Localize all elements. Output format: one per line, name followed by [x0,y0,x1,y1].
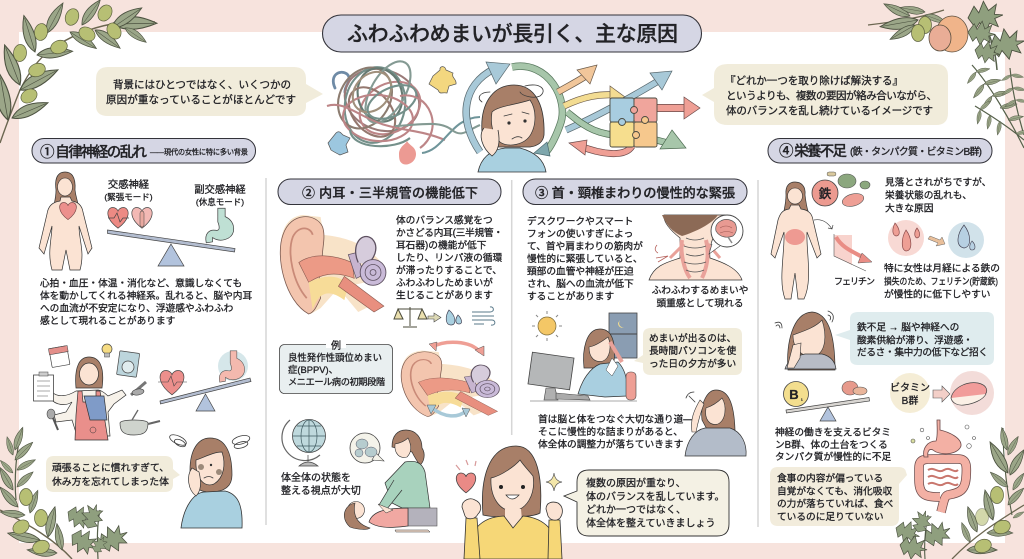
icon: vitamin B circle: B [789,387,799,402]
arrow: green wave [567,112,668,143]
text: inner ear description [396,214,503,302]
figure: multitasking woman [50,357,126,440]
callout: conclusion [564,470,729,536]
text: autonomic description: 体を動かしてくれる神経系。乱れると、脳や内耳 [40,289,252,302]
icon: heart on seesaw [158,370,187,395]
text: inner ear description: したり、リンパ液の循環 [396,251,502,264]
text: women and ferritin [884,262,1000,300]
arrow: curved [814,220,833,229]
seesaw 1 [108,230,235,266]
callout: digestion: 食事の内容が偏っている [777,472,883,484]
text: neck description: することがあります [527,290,614,302]
text: vitamin B and protein: タンパク質が慢性的に不足 [775,450,892,463]
icon: blood drops [888,220,924,256]
icon: puzzle block [610,98,657,147]
text: women and ferritin: 損失のため、フェリチン(貯蔵鉄) [884,276,998,286]
heading pill 3: ③ 首・頸椎まわりの慢性的な緊張 [535,184,735,200]
title pill: ふわふわめまいが長引く、主な原因 [347,23,678,46]
diagram: stomach and intestines [911,420,976,512]
callout: digestion: 自覚がなくても、消化吸収 [777,484,892,498]
arrow: blue arc [466,69,494,152]
sympathetic label: 交感神経 [108,178,150,191]
text: overlooked cause: 大きな原因 [885,202,933,214]
callout: evening symptoms [634,328,742,375]
icon: globe [282,420,326,466]
figure: smiling woman in yellow [462,446,562,559]
text: neck description: 頸部の血管や神経が圧迫 [527,264,634,278]
callout: conclusion: どれか一つではなく、 [586,504,686,516]
arrow: red lower [580,146,632,154]
icon: meat on seesaw [842,381,867,395]
callout: tired body: 休み方を忘れてしまった体 [52,475,169,488]
text: whole body view: 整える視点が大切 [281,484,361,497]
example box [280,339,392,394]
icon: vitamin B badge: B群 [902,394,918,407]
callout: digestion: ているのに足りていない [777,511,884,523]
text: inner ear description: 耳石器)の機能が低下 [396,238,487,252]
icon: heart with rays [456,460,476,493]
olive branch: top left [0,0,157,143]
example box: 良性発作性頭位めまい [288,352,382,363]
sympathetic label [104,178,153,202]
text: autonomic description: への血流が不安定になり、浮遊感やふわふわ [40,302,233,314]
callout: evening symptoms: った日の夕方が多い [649,357,736,370]
text: whole body view: 体全体の状態を [281,471,351,484]
heading pill 3 [523,179,747,204]
arrow: to water drop [928,236,945,246]
callout: evening symptoms: めまいが出るのは、 [649,332,736,344]
figure: tired woman [775,311,836,370]
icon: night window [609,313,637,358]
parasympathetic label [194,183,246,207]
text: autonomic description: 感として現れることがあります [40,314,175,327]
icon: iron circle: 鉄 [819,186,832,201]
text: autonomic description: 心拍・血圧・体温・消化など、意識しなくても [40,276,242,290]
icon: question mark [333,72,349,91]
diagram: neck and brain [649,215,743,280]
figure: woman at desk [528,329,637,401]
text: neck description: フォンの使いすぎによっ [527,227,633,240]
heading pill 2 [278,179,501,204]
text: neck description [527,214,643,302]
callout: explanation right: というよりも、複数の要因が絡み合いながら、 [726,89,937,102]
text: overlooked cause: 見落とされがちですが、 [885,176,991,188]
callout: evening symptoms: 長時間パソコンを使 [649,344,736,357]
figure: standing woman with abdomen [771,182,821,299]
title pill [322,15,702,52]
text: inner ear description: ふわふわしためまいが [396,276,493,289]
icon: tangled threads [327,54,480,153]
heading pill 4 [768,138,992,163]
figure: dizzy woman [168,433,251,528]
callout: tired body [46,456,180,492]
text: women and ferritin: 特に女性は月経による鉄の [884,262,1000,274]
figure: woman holding head [685,390,746,456]
olive and herb: bottom left [0,426,133,559]
seesaw 2 [160,378,251,411]
callout: explanation right: 『どれか一つを取り除けば解決する』 [725,74,903,87]
callout: iron deficiency: だるさ・集中力の低下など招く [857,346,988,358]
text: neck pathway: 首は脳と体をつなぐ大切な通り道— [538,412,693,426]
text: neck pathway: 体全体の調整力が落ちていきます [538,438,683,450]
heading pill 2: ② 内耳・三半規管の機能低下 [302,186,478,200]
text: inner ear description: 体のバランス感覚をつ [396,214,493,226]
example box: 症(BPPV)、 [288,364,338,375]
text: neck pathway: そこに慢性的な詰まりがあると、 [538,425,683,438]
icon: washing machine [117,351,140,377]
arrow: green arc [512,66,562,152]
central illustration: tangled threads, dizzy woman, arrows, puzzle [327,54,700,172]
icon: worried woman [478,85,546,172]
icon: vitamin B circle: ₁ [801,396,803,402]
parasympathetic label: (休息モード) [196,197,244,207]
text: inner ear description: が滞ったりすることで、 [396,264,502,276]
callout: iron deficiency [835,312,994,365]
icon: balance scale [394,307,427,327]
callout: iron deficiency: 酸素供給が滞り、浮遊感・ [857,334,973,346]
callout: digestion [770,467,907,526]
icon: sun [532,311,562,341]
icon: whisk and spoon [47,382,146,430]
icon: pot [120,410,160,435]
callout: background left: 背景にはひとつではなく、いくつかの [113,78,291,91]
text: neck caption [652,284,748,310]
heading pill 1 [32,138,256,163]
icon: stomach [206,208,234,243]
callout: digestion: の力が落ちていれば、食べ [777,497,894,510]
icon: water drops [446,310,462,325]
arrow: red right [655,104,685,112]
text: neck description: 慢性的に緊張していると、 [527,252,643,265]
figure: practitioner and patient [344,430,437,532]
heading pill 4: ④ 栄養不足 [779,143,848,160]
text: inner ear description: 生じることがあります [396,288,493,302]
text: neck caption: 頭重感として現れる [657,296,743,310]
icon: light bulb [102,344,112,357]
section 2: inner ear [278,179,503,532]
text: vitamin B and protein [775,426,892,463]
icon: vitamin B badge [890,373,930,413]
olive and herb: bottom right [892,427,1024,559]
icon: clipboard [34,372,54,401]
text: overlooked cause [885,176,991,214]
section 3: neck tension [523,179,748,536]
arrow: blue [566,80,660,130]
herbs and olives: top right [868,0,1024,148]
icon: puzzle pieces [429,67,456,93]
text: vitamin B and protein: ンB群、体の土台をつくる [775,438,888,451]
figure: standing woman [39,172,92,270]
icon: sparkle [546,473,562,491]
callout: conclusion: 複数の原因が重なり、 [586,476,686,490]
icon: iron circle [812,180,838,206]
text: neck description: デスクワークやスマート [527,214,633,228]
parasympathetic label: 副交感神経 [194,183,246,196]
section 4: nutrition [768,138,1000,526]
chart: ferritin decline: フェリチン [834,276,875,286]
callout: explanation right [702,64,948,125]
icon: greens and meat [827,172,870,209]
callout: tired body: 頑張ることに慣れすぎて、 [52,461,169,474]
arrow: orange [558,73,590,92]
sympathetic label: (緊張モード) [104,192,153,202]
icon: pale drop [948,222,984,258]
chart: ferritin decline [834,234,875,286]
text: autonomic description [40,276,252,327]
icon: wind [472,307,495,325]
callout: conclusion: 体のバランスを乱しています。 [586,491,724,503]
text: vitamin B and protein: 神経の働きを支えるビタミ [775,426,891,438]
icon: heart and thermometer [108,208,152,228]
example box: メニエール病の初期段階 [288,376,385,387]
callout: background left: 原因が重なっていることがほとんどです [106,93,296,106]
icon: meat circle [950,371,994,415]
text: inner ear description: かさどる内耳(三半規管・ [396,226,503,239]
arrow: flow [428,313,441,322]
section 1: autonomic nerves [32,138,256,528]
icon: stomach in circle [218,351,248,382]
text: neck pathway [538,412,693,450]
arrow: to meat [933,386,950,402]
diagram: inner ear with arrows [401,342,499,417]
heading pill 1: ① 自律神経の乱れ [40,144,148,161]
callout: explanation right: 体のバランスを乱し続けているイメージです [726,104,933,117]
text: neck description: て、首や肩まわりの筋肉が [527,240,643,252]
diagram: inner ear [280,215,386,314]
icon: vitamin B badge: ビタミン [890,382,930,394]
icon: calendar [48,346,70,368]
text: women and ferritin: が慢性的に低下しやすい [884,288,990,300]
callout: background left [96,67,323,116]
icon: thought bubble [350,433,384,463]
icon: vitamin B circle [784,382,808,406]
callout: conclusion: 体全体を整えていきましょう [586,516,716,530]
callout: iron deficiency: 鉄不足 → 脳や神経への [857,320,959,334]
text: overlooked cause: 栄養状態の乱れも、 [885,188,972,202]
seesaw 3 [786,398,870,421]
text: neck description: され、脳への血流が低下 [527,277,634,290]
text: whole body view [281,471,361,497]
arrow: yellow [564,95,615,106]
heading pill 4: (鉄・タンパク質・ビタミンB群) [850,145,982,158]
text: neck caption: ふわふわするめまいや [652,284,748,296]
example box: 例 [331,339,341,352]
heading pill 1: ――現代の女性に特に多い背景 [150,148,248,156]
